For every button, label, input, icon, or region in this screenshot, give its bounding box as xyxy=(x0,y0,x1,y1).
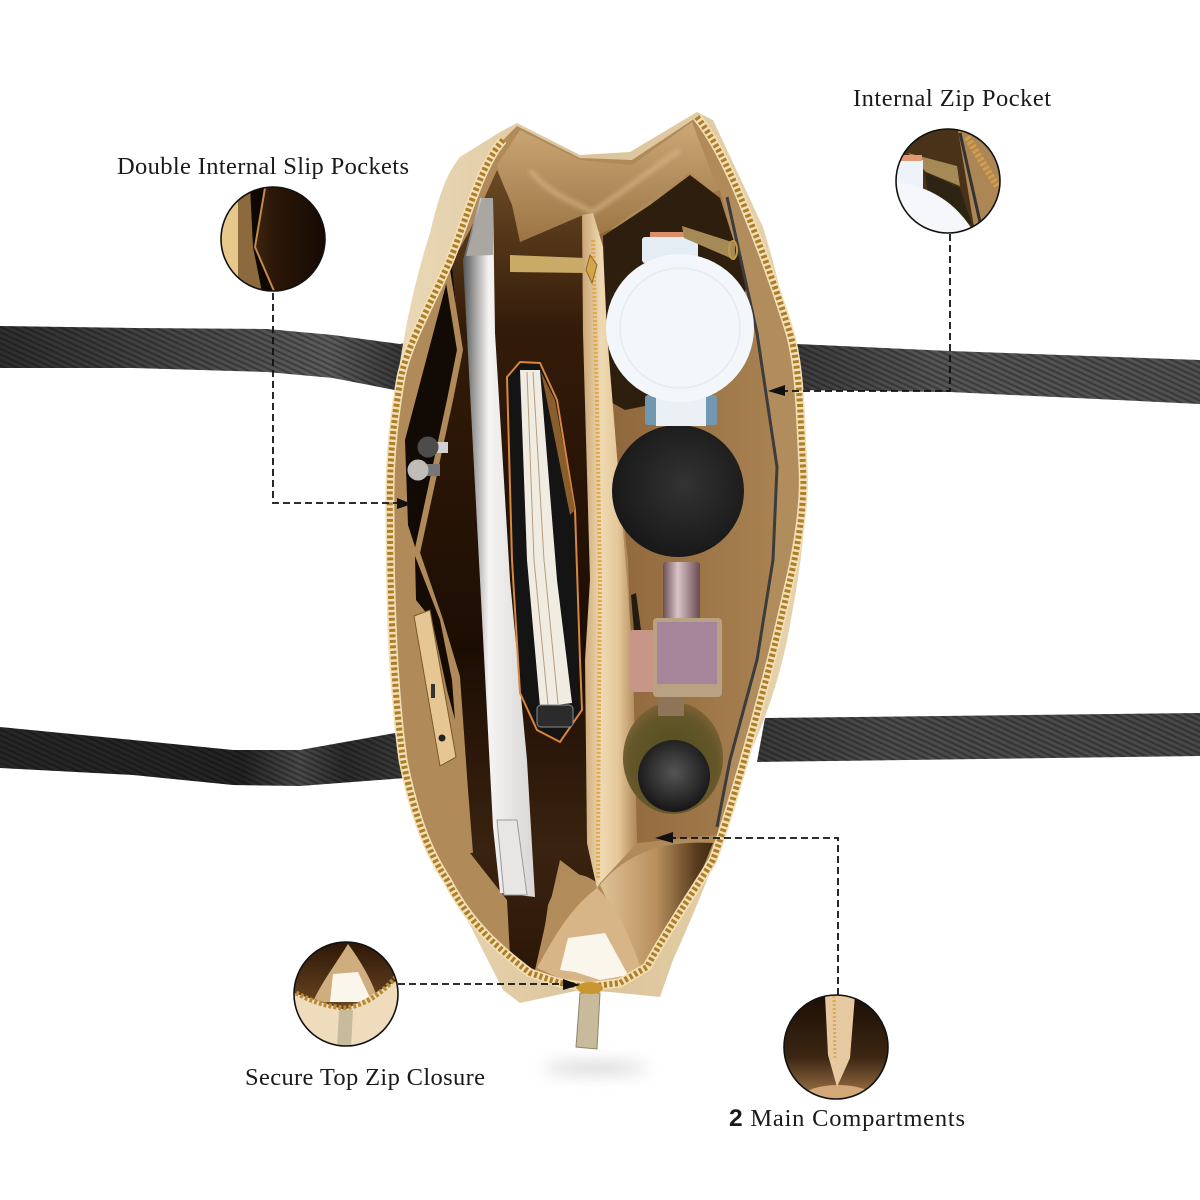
arrow head xyxy=(655,832,673,843)
bottle neck xyxy=(642,237,698,263)
main left compartment xyxy=(417,170,597,970)
circle outline xyxy=(294,942,398,1046)
lit fold crease xyxy=(530,150,680,212)
lower left lining fold xyxy=(543,874,597,934)
bag outer shell xyxy=(387,112,806,1003)
white gap at corner xyxy=(560,933,628,980)
divider xyxy=(825,995,855,1087)
dark recess behind bottle xyxy=(603,175,748,410)
perfume ball cap xyxy=(638,740,710,812)
right pocket panel xyxy=(747,282,748,285)
dark zip line xyxy=(960,133,980,222)
bottle hinge xyxy=(645,395,717,425)
lining base xyxy=(800,1085,876,1115)
circle outline xyxy=(221,187,325,291)
pull tab xyxy=(337,1010,353,1048)
black ball xyxy=(612,425,744,557)
phone xyxy=(414,610,456,766)
detail circle xyxy=(220,186,326,292)
bottle lid xyxy=(606,254,754,402)
lining base xyxy=(390,117,803,987)
zip slider xyxy=(577,982,603,994)
zip stripe xyxy=(834,996,835,1060)
phone port xyxy=(431,684,435,698)
zip tab on divider xyxy=(510,255,586,273)
strap: top left xyxy=(0,326,412,392)
circle outline xyxy=(784,995,888,1099)
right zip tab xyxy=(682,226,737,260)
earphones xyxy=(408,436,448,480)
bottle lid xyxy=(898,188,970,232)
perfume bottle xyxy=(623,698,723,814)
left pocket flap xyxy=(417,270,470,853)
right compartment wall xyxy=(596,190,777,843)
callout: internal zip pocket xyxy=(768,85,1051,396)
callout: 2 main compartments xyxy=(655,832,965,1132)
black upper left pocket xyxy=(405,262,460,553)
notebook xyxy=(507,362,582,742)
laptop xyxy=(463,198,535,897)
dashed leader xyxy=(273,293,398,503)
zipper arc xyxy=(296,977,396,1008)
zip strip xyxy=(222,202,238,276)
bottle neck xyxy=(896,160,923,190)
nail polish xyxy=(653,562,722,697)
zip ring xyxy=(729,241,737,259)
flap edge xyxy=(255,188,274,291)
divider zip puller xyxy=(586,255,597,283)
dashed leader xyxy=(670,838,838,995)
detail circle xyxy=(784,996,888,1098)
label: Internal Zip Pocket xyxy=(853,85,1051,112)
strap: bottom right xyxy=(757,713,1200,762)
zip teeth xyxy=(967,137,997,186)
detail circle xyxy=(897,130,1000,232)
laptop foot xyxy=(497,820,527,895)
notebook pages xyxy=(520,370,572,707)
black behind phone xyxy=(415,556,455,720)
perfume neck xyxy=(658,698,684,716)
main zipper xyxy=(390,117,803,987)
polish body xyxy=(653,618,722,697)
white bottle xyxy=(606,232,754,426)
callout: double internal slip pockets xyxy=(117,153,412,509)
label: 2 Main Compartments xyxy=(729,1105,965,1132)
strap: bottom left xyxy=(0,727,405,786)
callout: secure top zip closure xyxy=(245,942,580,1091)
circle outline xyxy=(896,129,1000,233)
tan lining xyxy=(238,193,262,289)
white gap xyxy=(330,972,372,1002)
dashed leader xyxy=(782,234,950,391)
arrow head xyxy=(563,979,580,990)
pocket panel xyxy=(958,130,1000,233)
divider zip stripe xyxy=(593,240,600,880)
gold flaps xyxy=(294,980,398,1046)
black wedge xyxy=(250,186,274,292)
zip pull tab xyxy=(576,982,603,1049)
notebook clip xyxy=(537,705,573,727)
arch fold xyxy=(313,944,378,1002)
notebook flap xyxy=(541,372,575,515)
dashed leader xyxy=(398,983,566,985)
small pink polish xyxy=(630,593,658,692)
strap: top right xyxy=(797,344,1200,404)
lower right lining fold xyxy=(600,843,713,975)
label: Secure Top Zip Closure xyxy=(245,1064,485,1091)
handbag xyxy=(387,112,806,1049)
shadow under bag xyxy=(543,1063,647,1073)
tab xyxy=(908,153,960,186)
detail circle xyxy=(294,942,398,1048)
lower left lining xyxy=(508,925,510,946)
label: Double Internal Slip Pockets xyxy=(117,153,409,180)
upper lining folds xyxy=(497,122,722,242)
lit bag corner xyxy=(537,888,642,982)
right pocket zip line xyxy=(717,197,777,827)
centre divider xyxy=(582,213,637,888)
arrow head xyxy=(768,385,785,396)
dark recess xyxy=(925,172,972,225)
arrow head xyxy=(397,498,412,509)
laptop lid xyxy=(466,198,493,256)
